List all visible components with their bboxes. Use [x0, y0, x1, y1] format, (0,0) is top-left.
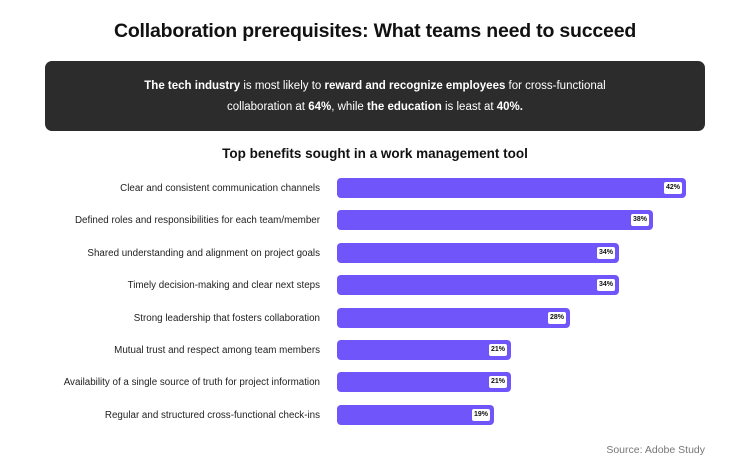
row 8: [105, 405, 494, 425]
row 3: 34%: [599, 249, 613, 256]
row 6: [114, 340, 511, 360]
row 6: 21%: [491, 346, 505, 353]
callout box: The tech industry is most likely to reward and recognize employees for cross-functional: [144, 80, 606, 92]
row 7: Availability of a single source of truth for project information: [64, 377, 320, 388]
row 4: 34%: [599, 281, 613, 288]
source: Source: Adobe Study: [606, 444, 705, 456]
row 4: Timely decision-making and clear next steps: [128, 280, 320, 291]
row 2: Defined roles and responsibilities for each team/member: [75, 215, 320, 226]
row 8: 19%: [474, 411, 488, 418]
row 7: 21%: [491, 378, 505, 385]
callout box: [45, 61, 705, 131]
row 1: 42%: [666, 184, 680, 191]
row 2: 38%: [633, 216, 647, 223]
callout box: collaboration at 64%, while the education is least at 40%.: [227, 101, 523, 113]
row 3: Shared understanding and alignment on project goals: [87, 248, 320, 259]
row 5: 28%: [550, 314, 564, 321]
row 4: [128, 275, 619, 295]
row 1: [120, 178, 686, 198]
title: Collaboration prerequisites: What teams need to succeed: [114, 20, 636, 42]
chart subtitle: Top benefits sought in a work management tool: [222, 146, 528, 161]
row 5: Strong leadership that fosters collaboration: [134, 313, 320, 324]
bar chart: [64, 178, 686, 425]
row 6: Mutual trust and respect among team members: [114, 345, 320, 356]
row 5: [134, 308, 570, 328]
row 1: Clear and consistent communication channels: [120, 183, 320, 194]
row 8: Regular and structured cross-functional check-ins: [105, 410, 320, 421]
row 7: [64, 372, 511, 392]
row 3: [87, 243, 619, 263]
row 2: [75, 210, 653, 230]
